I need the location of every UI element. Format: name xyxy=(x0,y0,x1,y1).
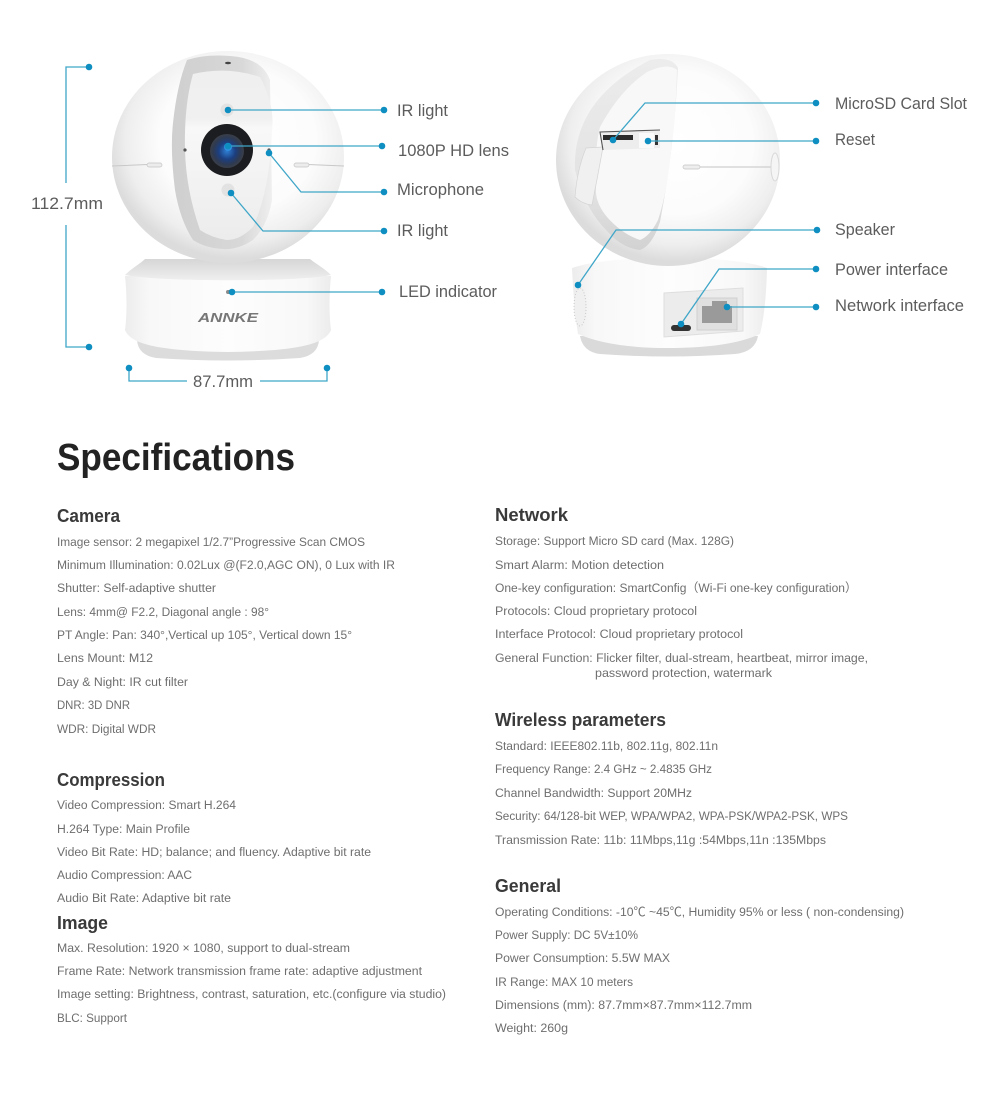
wireless spec lines xyxy=(495,739,848,847)
panel: general xyxy=(495,876,904,1035)
wireless spec lines: Transmission Rate: 11b: 11Mbps,11g :54Mbps,11n :135Mbps xyxy=(495,833,826,847)
camera spec lines: DNR: 3D DNR xyxy=(57,698,130,712)
leader: power xyxy=(678,266,819,327)
heading: compression: Compression xyxy=(57,770,165,790)
label: network: Network interface xyxy=(835,296,964,315)
panel: camera xyxy=(57,506,395,736)
image spec lines: Max. Resolution: 1920 × 1080, support to dual-stream xyxy=(57,941,350,955)
camera logo: ANNKE xyxy=(197,311,259,325)
height dimension value: 112.7mm xyxy=(31,194,103,213)
network spec lines: Storage: Support Micro SD card (Max. 128G) xyxy=(495,534,734,548)
panel: network xyxy=(495,505,868,680)
network spec lines xyxy=(495,534,868,680)
general spec lines: IR Range: MAX 10 meters xyxy=(495,975,633,989)
label: microphone: Microphone xyxy=(397,180,484,199)
camera lens xyxy=(201,124,253,176)
rear ball xyxy=(556,54,780,266)
network spec lines: General Function: Flicker filter, dual-stream, heartbeat, mirror image, xyxy=(495,651,868,665)
network spec lines: One-key configuration: SmartConfig（Wi-Fi one-key configuration） xyxy=(495,581,857,595)
label: reset: Reset xyxy=(835,130,875,149)
heading: image: Image xyxy=(57,913,108,933)
image spec lines: BLC: Support xyxy=(57,1011,128,1025)
network spec lines: Interface Protocol: Cloud proprietary protocol xyxy=(495,627,743,641)
general spec lines: Power Consumption: 5.5W MAX xyxy=(495,951,670,965)
leader: IR light top xyxy=(225,107,387,113)
image spec lines: Frame Rate: Network transmission frame rate: adaptive adjustment xyxy=(57,964,423,978)
label: IR light: IR light xyxy=(397,101,448,120)
wireless spec lines: Security: 64/128-bit WEP, WPA/WPA2, WPA-PSK/WPA2-PSK, WPS xyxy=(495,809,848,823)
rear camera illustration xyxy=(556,54,780,356)
camera spec lines xyxy=(57,535,395,736)
heading: wireless parameters: Wireless parameters xyxy=(495,710,666,730)
camera spec lines: Lens: 4mm@ F2.2, Diagonal angle : 98° xyxy=(57,605,269,619)
label: LED indicator: LED indicator xyxy=(399,282,497,301)
MicroSD slot and reset xyxy=(600,130,660,150)
rear base xyxy=(572,258,767,356)
camera spec lines: PT Angle: Pan: 340°,Vertical up 105°, Vertical down 15° xyxy=(57,628,352,642)
leader: microphone xyxy=(266,150,387,195)
card slot flap xyxy=(575,147,603,205)
network spec lines: password protection, watermark xyxy=(595,666,773,680)
network spec lines: Protocols: Cloud proprietary protocol xyxy=(495,604,697,618)
camera spec lines: Shutter: Self-adaptive shutter xyxy=(57,581,216,595)
camera spec lines: Lens Mount: M12 xyxy=(57,651,153,665)
camera ball xyxy=(112,51,344,263)
general spec lines xyxy=(495,905,904,1035)
camera spec lines: Minimum Illumination: 0.02Lux @(F2.0,AGC ON), 0 Lux with IR xyxy=(57,558,395,572)
panel: wireless parameters xyxy=(495,710,848,847)
height dimension bracket xyxy=(66,64,92,350)
wireless spec lines: Frequency Range: 2.4 GHz ~ 2.4835 GHz xyxy=(495,762,712,776)
label: MicroSD: MicroSD Card Slot xyxy=(835,94,967,113)
leader: reset xyxy=(645,138,819,144)
wireless spec lines: Standard: IEEE802.11b, 802.11g, 802.11n xyxy=(495,739,718,753)
panel: compression xyxy=(57,770,371,905)
title: Specifications xyxy=(57,437,295,479)
panel: image xyxy=(57,913,446,1025)
front camera illustration xyxy=(112,51,344,360)
label: speaker: Speaker xyxy=(835,220,895,239)
camera spec lines: WDR: Digital WDR xyxy=(57,722,156,736)
leader: LED xyxy=(229,289,385,295)
IR lights and mic xyxy=(183,104,271,196)
heading: camera: Camera xyxy=(57,506,121,526)
image spec lines: Image setting: Brightness, contrast, saturation, etc.(configure via studio) xyxy=(57,987,446,1001)
compression spec lines: H.264 Type: Main Profile xyxy=(57,822,190,836)
image spec lines xyxy=(57,941,446,1025)
rear ports panel xyxy=(664,288,743,337)
camera spec lines: Day & Night: IR cut filter xyxy=(57,675,188,689)
camera base xyxy=(125,259,331,360)
general spec lines: Operating Conditions: -10℃ ~45℃, Humidity 95% or less ( non-condensing) xyxy=(495,905,904,919)
compression spec lines: Video Compression: Smart H.264 xyxy=(57,798,236,812)
label: lens: 1080P HD lens xyxy=(398,141,509,160)
general spec lines: Power Supply: DC 5V±10% xyxy=(495,928,638,942)
camera spec lines: Image sensor: 2 megapixel 1/2.7”Progressive Scan CMOS xyxy=(57,535,365,549)
network spec lines: Smart Alarm: Motion detection xyxy=(495,558,664,572)
width dimension value: 87.7mm xyxy=(193,372,253,391)
leader: speaker xyxy=(575,227,820,288)
compression spec lines: Audio Compression: AAC xyxy=(57,868,192,882)
wireless spec lines: Channel Bandwidth: Support 20MHz xyxy=(495,786,692,800)
leader: network xyxy=(724,304,819,310)
compression spec lines: Video Bit Rate: HD; balance; and fluency. Adaptive bit rate xyxy=(57,845,371,859)
general spec lines: Dimensions (mm): 87.7mm×87.7mm×112.7mm xyxy=(495,998,752,1012)
label: power: Power interface xyxy=(835,260,948,279)
leader: lens xyxy=(225,143,385,149)
leader: MicroSD xyxy=(610,100,819,143)
speaker holes xyxy=(574,288,586,326)
compression spec lines: Audio Bit Rate: Adaptive bit rate xyxy=(57,891,231,905)
heading: network: Network xyxy=(495,505,569,525)
label: IR light bottom: IR light xyxy=(397,221,448,240)
compression spec lines xyxy=(57,798,371,905)
leader: IR light bottom xyxy=(228,190,387,234)
width dimension bracket xyxy=(126,365,330,381)
heading: general: General xyxy=(495,876,561,896)
general spec lines: Weight: 260g xyxy=(495,1021,568,1035)
